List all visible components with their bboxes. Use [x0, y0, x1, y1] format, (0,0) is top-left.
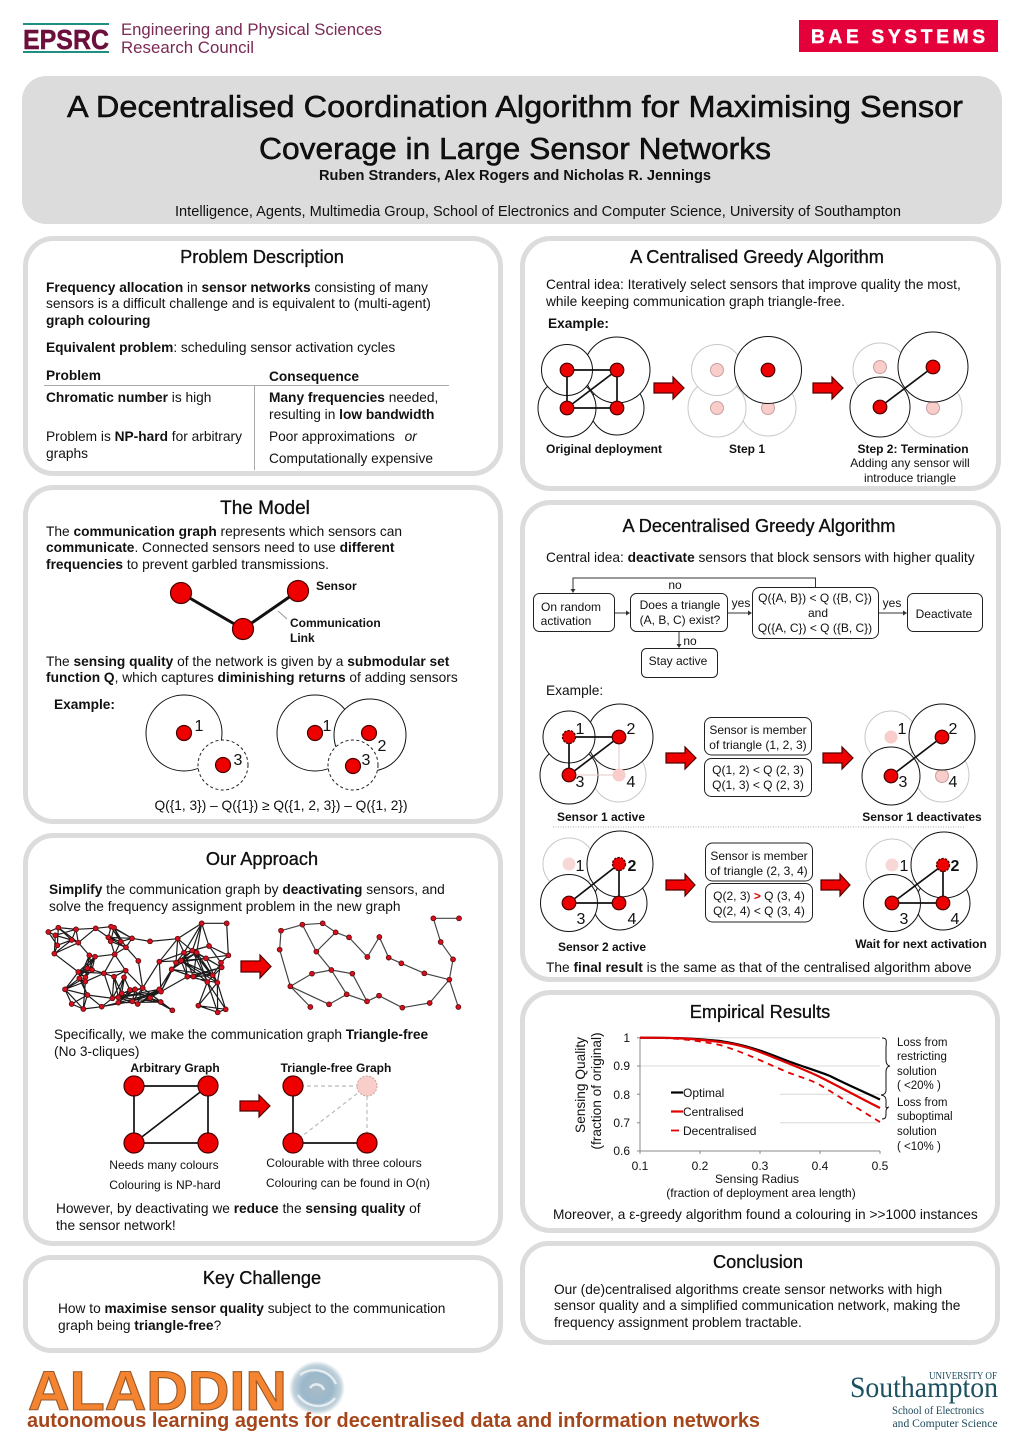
- logo: ALADDIN: [27, 1359, 760, 1432]
- panel: Empirical Results: [522, 992, 998, 1230]
- arrow: [654, 377, 684, 399]
- text block: [46, 654, 458, 685]
- annotation: loss notes: [897, 1037, 953, 1153]
- diagram: sensing example two: [277, 695, 406, 790]
- logo: EPSRC: Research Council: [121, 38, 254, 57]
- text block: function Q, which captures diminishing returns of adding sensors: [46, 670, 458, 685]
- text block: Equivalent problem: scheduling sensor activation cycles: [46, 340, 395, 355]
- panel: A Decentralised Greedy Algorithm: [522, 502, 998, 980]
- text block: How to maximise sensor quality subject to the communication: [58, 1301, 445, 1316]
- arrow: [821, 874, 850, 896]
- diagram: sensing example two: 3: [362, 752, 371, 769]
- table: [44, 368, 449, 470]
- heading: Our Approach: [206, 849, 318, 869]
- diagram: step 2 termination: Adding any sensor will: [850, 456, 970, 470]
- diagram: sensing example one: 1: [195, 718, 204, 735]
- line chart: 0.3: [752, 1159, 769, 1173]
- table: Consequence: [269, 369, 359, 384]
- annotation: loss notes: Loss from: [897, 1097, 948, 1109]
- diagram: arbitrary graph: [109, 1061, 221, 1192]
- diagram: sensor 1 active: 2: [627, 721, 636, 738]
- diagram: sensor 2 active: 1: [576, 858, 585, 875]
- flowchart: yes: [732, 596, 750, 610]
- text block: Specifically, we make the communication graph Triangle-free: [54, 1027, 429, 1042]
- heading: Key Challenge: [203, 1268, 321, 1288]
- authors: Ruben Stranders, Alex Rogers and Nicholas R. Jennings: [319, 168, 711, 184]
- diagram: step 2 termination: [850, 332, 970, 485]
- text block: the sensor network!: [56, 1218, 176, 1233]
- diagram: wait for next activation: 1: [900, 858, 909, 875]
- flowchart: yes: [883, 596, 901, 610]
- text block: Simplify the communication graph by deactivating sensors, and: [49, 882, 445, 897]
- logo: ALADDIN: ALADDIN: [28, 1359, 287, 1422]
- annotation: loss notes: Loss from: [897, 1037, 948, 1049]
- boxes: triangle test two: Q(2, 4) < Q (3, 4): [713, 904, 805, 918]
- text block: [54, 1027, 429, 1059]
- text block: Central idea: deactivate sensors that block sensors with higher quality: [546, 550, 975, 565]
- text block: [46, 524, 402, 572]
- line chart: 0.5: [872, 1159, 889, 1173]
- heading: The Model: [220, 498, 310, 519]
- line chart: (fraction of original): [589, 1032, 604, 1150]
- line chart: (fraction of deployment area length): [666, 1186, 856, 1200]
- panel: Problem Description: [26, 238, 500, 474]
- diagram: sensor 1 deactivates: 1: [898, 721, 907, 738]
- legend: [671, 1086, 756, 1138]
- table: Many frequencies needed,: [269, 390, 438, 405]
- diagram: wait for next activation: Wait for next activation: [855, 937, 987, 951]
- text block: Moreover, a ε-greedy algorithm found a colouring in >>1000 instances: [553, 1207, 978, 1222]
- text block: However, by deactivating we reduce the sensing quality of: [56, 1201, 421, 1216]
- panel: A Centralised Greedy Algorithm: [522, 238, 998, 488]
- boxes: triangle test two: of triangle (2, 3, 4): [710, 864, 808, 878]
- diagram: sensor 2 active: Sensor 2 active: [558, 940, 646, 954]
- boxes: triangle test two: Q(2, 3) > Q (3, 4): [713, 889, 805, 903]
- boxes: triangle test one: Q(1, 3) < Q (2, 3): [712, 778, 804, 792]
- diagram: triangle-free graph: Colouring can be found in O(n): [266, 1176, 430, 1190]
- table: Chromatic number is high: [46, 390, 211, 405]
- diagram: wait for next activation: 4: [951, 911, 960, 928]
- arrow: [823, 747, 853, 769]
- panel: Conclusion: [522, 1244, 998, 1342]
- annotation: loss notes: solution: [897, 1066, 937, 1078]
- label: Example:: [546, 683, 603, 698]
- line chart: 0.7: [613, 1116, 630, 1130]
- label: Example:: [54, 697, 115, 712]
- panel: Key Challenge: [26, 1258, 500, 1350]
- text block: [49, 882, 445, 914]
- table: graphs: [46, 446, 88, 461]
- arrow: [240, 1095, 270, 1117]
- diagram: sensor 1 deactivates: 2: [949, 721, 958, 738]
- diagram: sensor 1 active: 3: [576, 774, 585, 791]
- diagram: arbitrary graph: Needs many colours: [109, 1158, 219, 1172]
- arrow: [241, 955, 271, 978]
- logo: University of Southampton: Southampton: [850, 1371, 998, 1404]
- logo: EPSRC: Engineering and Physical Sciences: [121, 20, 382, 39]
- diagram: sensor 2 active: 4: [628, 911, 637, 928]
- arrow: [813, 377, 843, 399]
- text block: [554, 1282, 961, 1330]
- diagram: step 2 termination: introduce triangle: [864, 471, 956, 485]
- text block: [545, 277, 961, 331]
- flowchart: (A, B, C) exist?: [640, 613, 721, 627]
- diagram: dense network: [48, 923, 228, 1012]
- heading: Conclusion: [713, 1252, 803, 1272]
- table: Problem: [46, 368, 101, 383]
- diagram: sensing example two: 1: [323, 718, 332, 735]
- diagram: sensing example one: 3: [234, 752, 243, 769]
- flowchart: activation: [541, 614, 591, 628]
- text block: [56, 1201, 421, 1233]
- text block: Our (de)centralised algorithms create sensor networks with high: [554, 1282, 942, 1297]
- diagram: sensing example one: [146, 695, 248, 790]
- heading: A Decentralised Greedy Algorithm: [623, 516, 895, 536]
- line chart: Sensing Radius: [715, 1172, 799, 1186]
- text block: solve the frequency assignment problem in the new graph: [49, 899, 401, 914]
- heading: Problem Description: [180, 247, 344, 267]
- annotation: braces: [881, 1038, 890, 1119]
- diagram: communication graph: Link: [290, 631, 315, 645]
- diagram: original deployment: [538, 337, 662, 456]
- table: Computationally expensive: [269, 451, 433, 466]
- diagram: triangle-free graph: [266, 1061, 430, 1190]
- text block: frequencies to prevent garbled transmissions.: [46, 557, 329, 572]
- annotation: loss notes: restricting: [897, 1051, 947, 1063]
- diagram: sensing example two: 2: [378, 738, 387, 755]
- diagram: communication graph: [170, 579, 381, 645]
- text block: graph colouring: [46, 313, 150, 328]
- text block: Example:: [548, 316, 609, 331]
- diagram: triangle-free graph: Triangle-free Graph: [281, 1061, 391, 1075]
- heading: Empirical Results: [690, 1002, 830, 1022]
- line chart: 0.8: [613, 1088, 630, 1102]
- diagram: communication graph: Communication: [290, 616, 381, 630]
- diagram: triangle-free graph: Colourable with three colours: [266, 1156, 422, 1170]
- logo: University of Southampton: UNIVERSITY OF: [929, 1371, 997, 1382]
- boxes: triangle test one: Q(1, 2) < Q (2, 3): [712, 763, 804, 777]
- diagram: wait for next activation: [855, 832, 987, 951]
- diagram: communication graph: Sensor: [316, 579, 357, 593]
- line chart: 0.1: [632, 1159, 649, 1173]
- diagram: sensor 1 deactivates: [862, 704, 982, 824]
- flowchart: [534, 578, 982, 678]
- text block: sensor quality and a simplified communication network, making the: [554, 1298, 961, 1313]
- text block: communicate. Connected sensors need to use different: [46, 540, 395, 555]
- table: resulting in low bandwidth: [269, 407, 434, 422]
- text block: (No 3-cliques): [54, 1044, 139, 1059]
- logo: BAE Systems: BAE SYSTEMS: [811, 27, 985, 48]
- diagram: arbitrary graph: Colouring is NP-hard: [109, 1178, 221, 1192]
- flowchart: On random: [541, 600, 601, 614]
- text block: sensors is a difficult challenge and is equivalent to (multi-agent): [46, 296, 431, 311]
- annotation: loss notes: ( <10% ): [897, 1141, 941, 1153]
- title second line: Coverage in Large Sensor Networks: [259, 131, 771, 166]
- diagram: arbitrary graph: Arbitrary Graph: [130, 1061, 220, 1075]
- text block: frequency assignment problem tractable.: [554, 1315, 802, 1330]
- diagram: wait for next activation: 3: [900, 911, 909, 928]
- boxes: triangle test one: Sensor is member: [709, 723, 807, 737]
- flowchart: no: [668, 578, 682, 592]
- line chart: Sensing Quality: [573, 1037, 588, 1133]
- text block: Central idea: Iteratively select sensors that improve quality the most,: [546, 277, 961, 292]
- annotation: loss notes: suboptimal: [897, 1111, 953, 1123]
- affiliation: Intelligence, Agents, Multimedia Group, School of Electronics and Computer Science, University of Southampton: [175, 204, 901, 220]
- flowchart: Deactivate: [916, 607, 973, 621]
- line chart: 1: [623, 1031, 630, 1045]
- line chart: [573, 1031, 953, 1200]
- text block: The communication graph represents which sensors can: [46, 524, 402, 539]
- diagram: sensor 2 active: [540, 831, 653, 954]
- boxes: triangle test two: [706, 843, 812, 922]
- text block: Frequency allocation in sensor networks consisting of many: [46, 280, 428, 295]
- legend: Centralised: [683, 1105, 744, 1119]
- text block: [58, 1301, 445, 1333]
- panel: The Model: [26, 488, 500, 822]
- boxes: triangle test two: Sensor is member: [710, 849, 808, 863]
- logo: University of Southampton: School of Electronics: [892, 1405, 984, 1417]
- table: Poor approximations or: [269, 429, 418, 444]
- tagline: autonomous learning agents for decentralised data and information networks: [27, 1410, 760, 1432]
- flowchart: no: [683, 634, 697, 648]
- diagram: simplified network: [280, 918, 459, 1008]
- logo: University of Southampton: [850, 1371, 998, 1430]
- arrow: [666, 874, 695, 896]
- line chart: 0.6: [613, 1144, 630, 1158]
- annotation: loss notes: ( <20% ): [897, 1080, 941, 1092]
- diagram: wait for next activation: 2: [951, 858, 960, 875]
- flowchart: Does a triangle: [640, 598, 721, 612]
- title: A Decentralised Coordination Algorithm for Maximising Sensor: [67, 89, 963, 124]
- boxes: triangle test one: [704, 718, 812, 796]
- text block: graph being triangle-free?: [58, 1318, 222, 1333]
- diagram: sensor 1 deactivates: 4: [949, 774, 958, 791]
- line chart: 0.2: [692, 1159, 709, 1173]
- logo: University of Southampton: and Computer Science: [892, 1418, 998, 1430]
- flowchart: and: [808, 606, 828, 620]
- diagram: sensor 2 active: 2: [628, 858, 637, 875]
- formula: Q({1, 3}) – Q({1}) ≥ Q({1, 2, 3}) – Q({1, 2}): [154, 798, 408, 813]
- line chart: 0.9: [613, 1059, 630, 1073]
- diagram: step 1: [688, 336, 802, 456]
- text block: The final result is the same as that of the centralised algorithm above: [546, 960, 972, 975]
- diagram: sensor 1 deactivates: Sensor 1 deactivates: [862, 810, 982, 824]
- title banner: [22, 76, 1002, 224]
- heading: A Centralised Greedy Algorithm: [630, 247, 884, 267]
- text block: while keeping communication graph triangle-free.: [545, 294, 845, 309]
- line chart: 0.4: [812, 1159, 829, 1173]
- diagram: sensor 1 active: 4: [627, 774, 636, 791]
- legend: Decentralised: [683, 1124, 756, 1138]
- logo: EPSRC: EPSRC: [23, 24, 109, 55]
- flowchart: Stay active: [649, 654, 708, 668]
- diagram: sensor 1 deactivates: 3: [899, 774, 908, 791]
- legend: Optimal: [683, 1086, 724, 1100]
- flowchart: Q({A, B}) < Q ({B, C}): [758, 591, 872, 605]
- diagram: original deployment: Original deployment: [546, 442, 662, 456]
- diagram: sensor 1 active: 1: [576, 721, 585, 738]
- text block: The sensing quality of the network is given by a submodular set: [46, 654, 450, 669]
- logo: BAE Systems: [799, 20, 998, 52]
- diagram: sensor 1 active: Sensor 1 active: [557, 810, 645, 824]
- text block: [46, 280, 431, 355]
- logo: EPSRC: [23, 20, 382, 57]
- boxes: triangle test one: of triangle (1, 2, 3): [709, 738, 807, 752]
- arrow: [666, 747, 696, 769]
- diagram: step 2 termination: Step 2: Termination: [857, 442, 969, 456]
- diagram: step 1: Step 1: [729, 442, 765, 456]
- table: Problem is NP-hard for arbitrary: [46, 429, 242, 444]
- flowchart: Q({A, C}) < Q ({B, C}): [758, 621, 872, 635]
- diagram: sensor 2 active: 3: [577, 911, 586, 928]
- diagram: sensor 1 active: [540, 704, 653, 824]
- annotation: loss notes: solution: [897, 1126, 937, 1138]
- panel: Our Approach: [26, 836, 500, 1244]
